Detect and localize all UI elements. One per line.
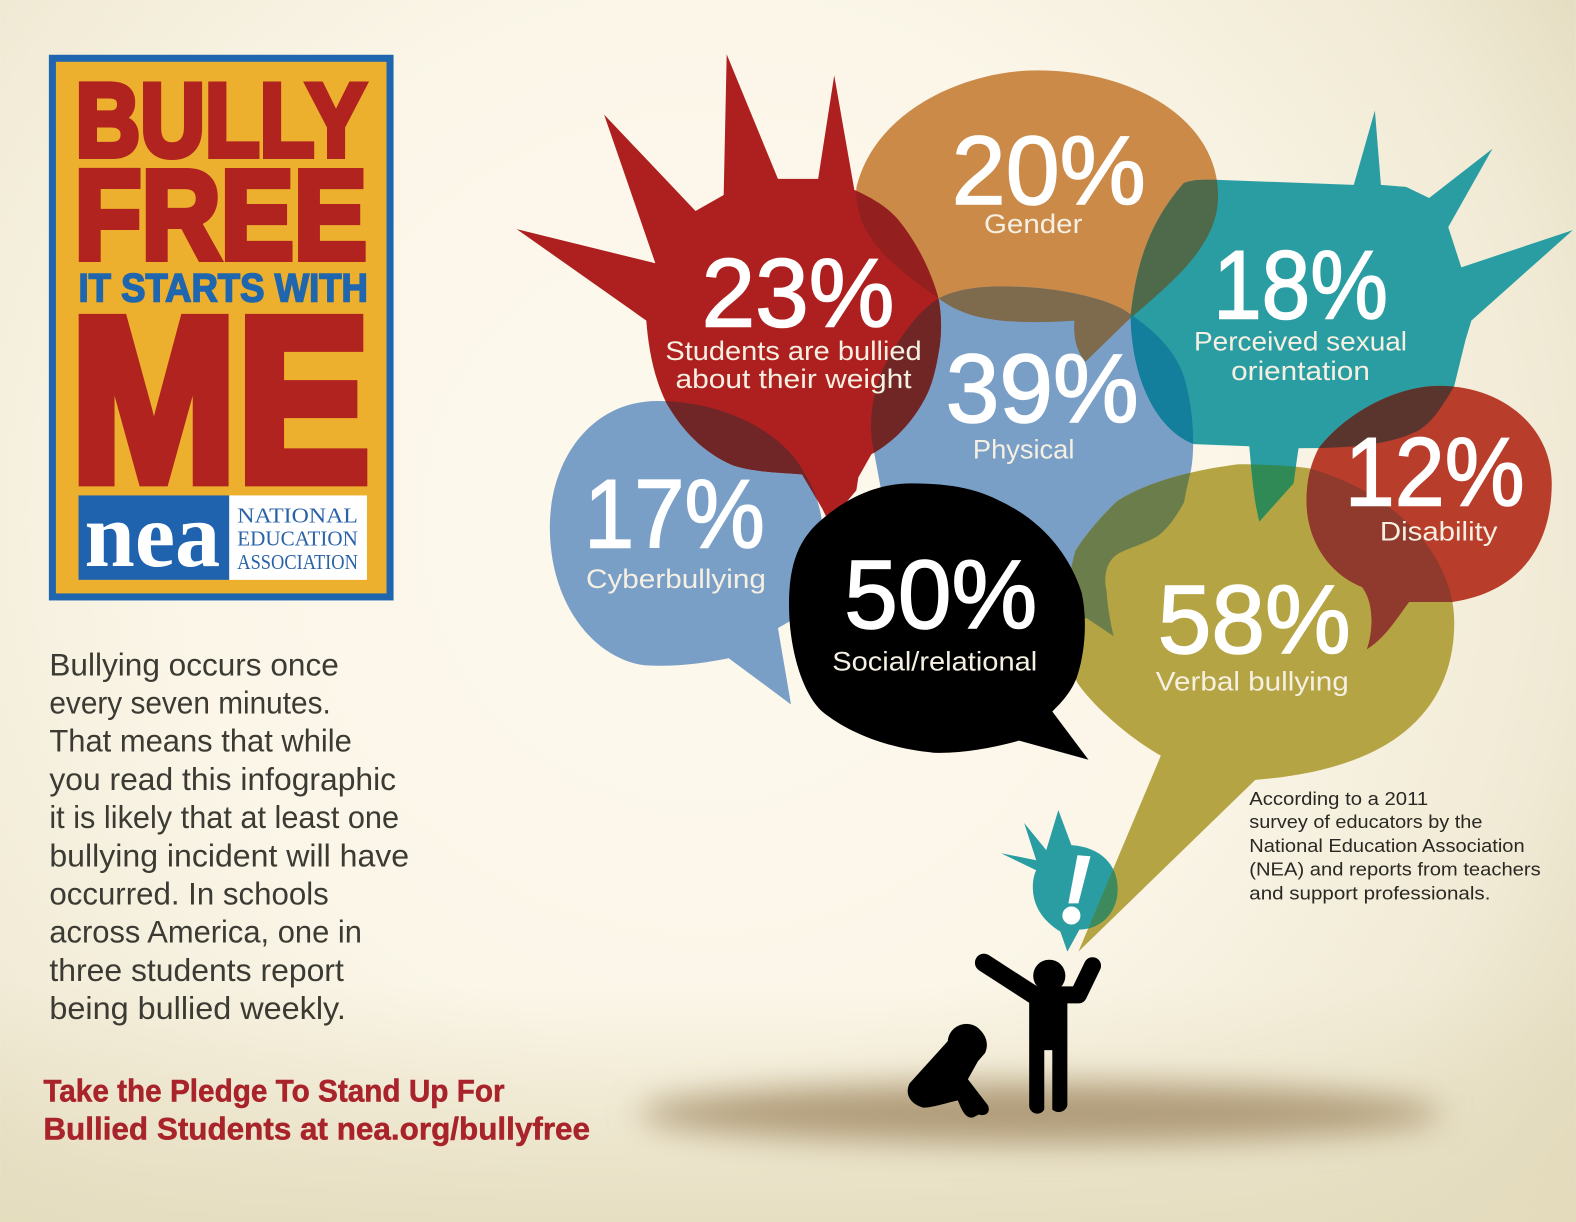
intro paragraph <box>49 647 409 1026</box>
logo line: It starts with: IT STARTS WITH <box>79 265 368 310</box>
bubble: disability <box>1307 386 1552 649</box>
logo word: BULLY: BULLY <box>76 62 366 178</box>
source note: (NEA) and reports from teachers <box>1249 858 1541 879</box>
bubble: physical <box>874 286 1194 568</box>
intro paragraph: it is likely that at least one <box>49 800 399 835</box>
icon: exclamation bubble <box>1001 810 1118 952</box>
intro paragraph: being bullied weekly. <box>49 991 346 1026</box>
stat: 20% gender: Gender <box>984 208 1082 239</box>
intro paragraph: across America, one in <box>49 915 362 950</box>
source note <box>1249 788 1541 903</box>
NEA logo block: nea <box>85 484 220 586</box>
source note: survey of educators by the <box>1249 811 1482 832</box>
source note: National Education Association <box>1249 835 1525 856</box>
stat: 12% disability: 12% <box>1345 417 1525 526</box>
stat: 23% weight <box>665 239 922 394</box>
intro paragraph: occurred. In schools <box>49 876 329 911</box>
logo: Bully Free <box>52 58 390 597</box>
intro paragraph: three students report <box>49 953 344 988</box>
bubble: gender <box>856 70 1218 362</box>
pledge call to action: Bullied Students at nea.org/bullyfree <box>43 1112 590 1147</box>
icon: crouching figure <box>908 1024 989 1118</box>
intro paragraph: Bullying occurs once <box>49 647 339 682</box>
source note: According to a 2011 <box>1249 788 1428 809</box>
stat: 39% physical: 39% <box>946 334 1139 443</box>
bubble: weight <box>517 54 941 523</box>
NEA logo block: NATIONAL <box>237 504 358 528</box>
stat: 50% social: Social/relational <box>832 645 1037 676</box>
stat: 17% cyberbullying: Cyberbullying <box>586 563 766 594</box>
NEA logo block <box>79 484 367 586</box>
stat: 39% physical: Physical <box>973 433 1074 464</box>
stat: 23% weight: 23% <box>702 239 895 348</box>
stat: 50% social: 50% <box>844 540 1037 649</box>
stat: 18% orientation <box>1194 231 1407 386</box>
intro paragraph: every seven minutes. <box>49 686 331 721</box>
stat: 12% disability: Disability <box>1380 516 1498 547</box>
stat: 18% orientation: 18% <box>1213 231 1388 340</box>
source note: and support professionals. <box>1249 882 1490 903</box>
bubble: verbal bullying <box>1071 464 1454 952</box>
stat: 17% cyberbullying: 17% <box>584 460 765 569</box>
NEA logo block: ASSOCIATION <box>237 550 358 574</box>
stat: 20% gender: 20% <box>952 116 1146 225</box>
bubble: cyberbullying <box>550 401 822 704</box>
intro paragraph: bullying incident will have <box>49 838 409 873</box>
NEA logo block: EDUCATION <box>237 527 358 551</box>
stat: 23% weight: about their weight <box>675 363 912 394</box>
bubble: social/relational <box>789 483 1088 760</box>
intro paragraph: That means that while <box>49 724 352 759</box>
intro paragraph: you read this infographic <box>49 762 396 797</box>
stat: 58% verbal: 58% <box>1158 565 1351 674</box>
logo word: FREE: FREE <box>74 143 367 285</box>
ground shadow <box>638 1083 1442 1144</box>
pledge call to action <box>43 1073 590 1147</box>
stat: 23% weight: Students are bullied <box>665 335 922 366</box>
stat: 18% orientation: Perceived sexual <box>1194 326 1407 357</box>
stat: 18% orientation: orientation <box>1231 355 1370 386</box>
icon: standing figure <box>984 960 1092 1114</box>
logo word: ME: ME <box>70 270 370 530</box>
pledge call to action: Take the Pledge To Stand Up For <box>43 1073 505 1108</box>
stat: 58% verbal: Verbal bullying <box>1156 665 1349 696</box>
bubble: perceived sexual orientation <box>1131 111 1573 522</box>
